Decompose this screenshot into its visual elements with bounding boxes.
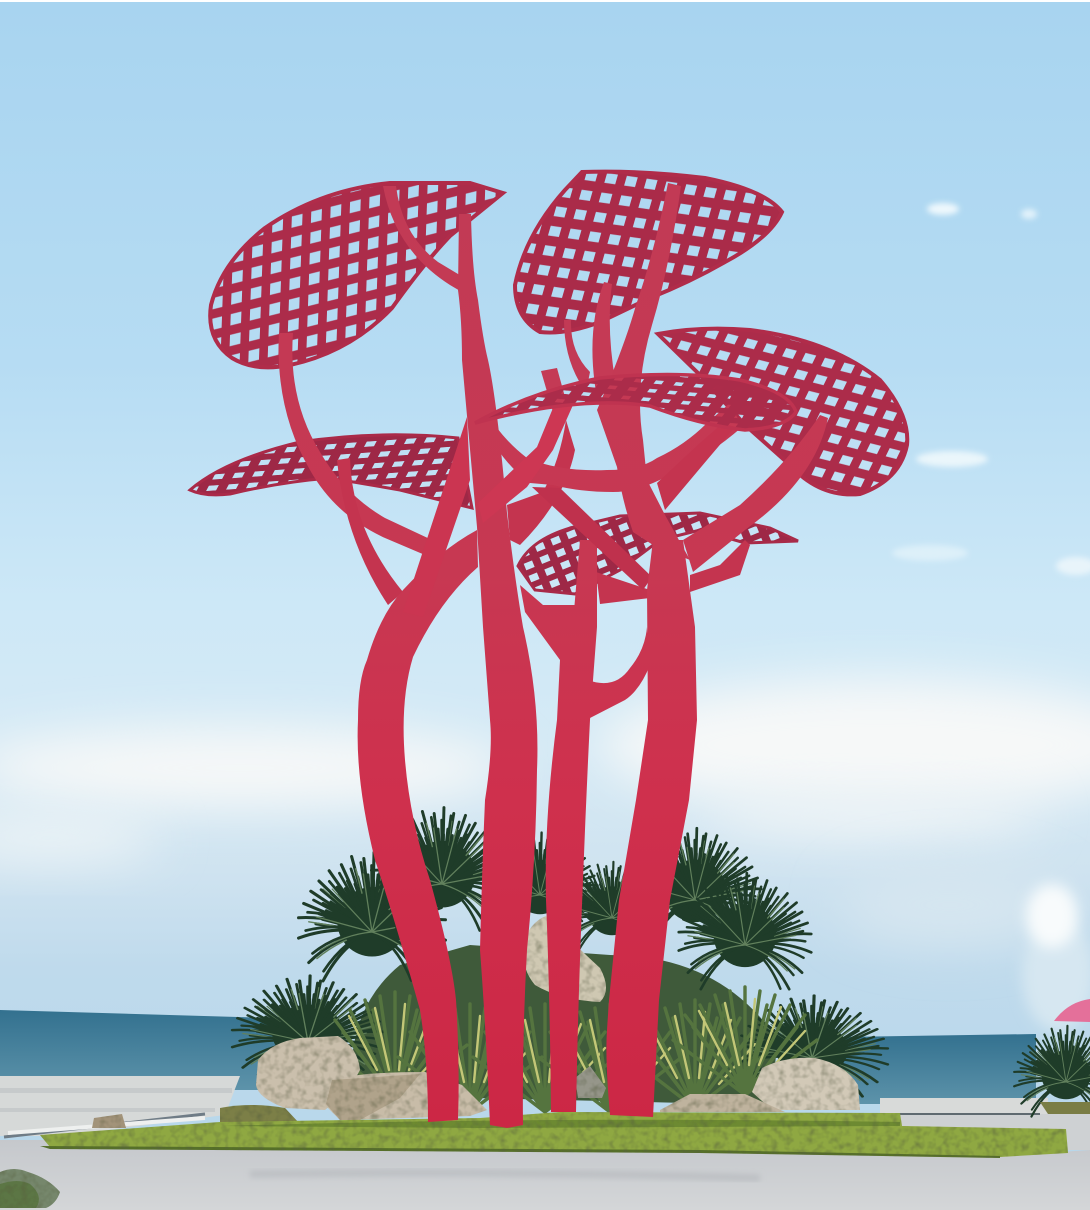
planting: palms and strap-leaf shrubs [232,808,888,1112]
shrub blades [673,987,817,1095]
plaza ground [0,1076,1090,1210]
right edge palm and umbrella [1014,999,1090,1118]
leaf: left flat [190,435,472,508]
shrub blades [538,1004,682,1112]
leaf: top left [210,183,503,367]
palm: far right [679,873,811,991]
sculpture: left trunk [358,530,478,1122]
palm: low right [736,996,888,1098]
leaf: lower right [518,513,798,594]
branch: lower right arc [690,540,750,592]
branch: right link [596,572,650,604]
leaf: right [658,329,907,494]
sea [0,1010,1036,1104]
shrub blades [323,992,467,1100]
sculpture: left diagonal strut [403,417,470,617]
palm: upper left centre [371,808,513,933]
leaf: centre flat [475,374,796,430]
branch: spike centre [592,282,616,392]
sculpture and leaves [190,172,907,1128]
shrub blades [398,1004,542,1112]
branch: left leaf stem [279,333,432,555]
branch: inner right stem [657,423,735,510]
branch: flat leaf stem [337,458,403,605]
branch: centre arc [497,403,742,492]
branch: curve behind diagonal strut [507,420,575,545]
palm: right of centre [560,862,664,954]
branch: right leaf stem [683,415,828,572]
branch: centre trunk arm [588,627,650,718]
sculpture: right trunk [606,540,697,1117]
branch: tall stalk to top centre leaf [597,183,690,560]
shrub blades [623,1000,767,1108]
shrub blades [473,1004,617,1112]
branch: stub [541,368,568,412]
branch: diagonal link [520,585,592,668]
sculpture: X strut [532,487,652,590]
palm: upper right [629,828,761,946]
palm: behind centre [482,833,598,935]
boulders [92,916,860,1128]
small foreground shrub [0,1169,60,1208]
sculpture: centre diagonal strut [478,405,573,523]
branch: spike left [564,320,590,392]
sculpture: central stalk and middle trunk [458,214,537,1128]
branch: top left fork [383,186,472,298]
clouds [0,203,1090,1031]
palm: upper left [299,852,445,983]
leaf: top centre [515,172,782,333]
hedge [40,1105,1068,1158]
sculpture: centre trunk [546,540,597,1112]
palm: low left [232,976,384,1084]
